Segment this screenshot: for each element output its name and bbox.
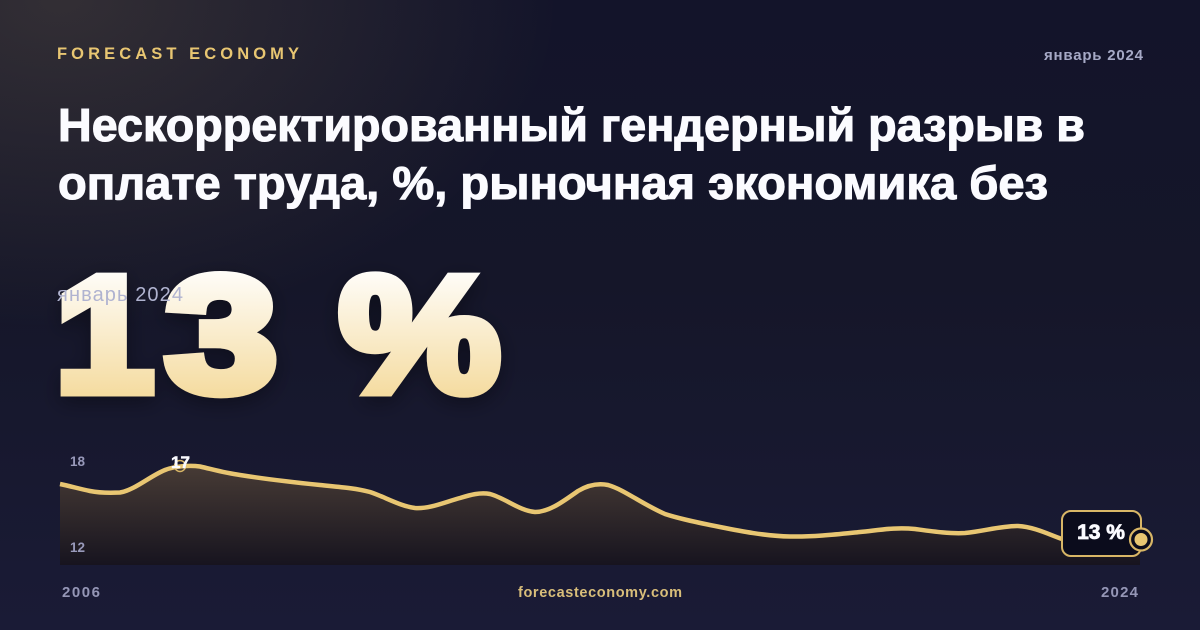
title: оплате труда, %, рыночная экономика без [58, 157, 1048, 209]
big number [55, 242, 500, 427]
axis label 18: 18 [70, 454, 86, 469]
big number: 1 [55, 244, 154, 427]
brand label: FORECAST ECONOMY [57, 45, 299, 63]
callout: last value [1062, 511, 1141, 556]
chart line [60, 466, 1062, 539]
title [58, 99, 1085, 209]
big number: 3 [166, 242, 277, 426]
axis label 12: 12 [70, 540, 85, 555]
end year: 2024 [1101, 584, 1139, 601]
big number: % [340, 243, 500, 426]
end marker [1130, 528, 1152, 550]
start year: 2006 [62, 584, 100, 601]
callout: last value: 13 % [1077, 521, 1125, 544]
source site: forecasteconomy.com [518, 585, 682, 601]
overlapping date label: январь 2024 [57, 284, 183, 306]
title: Нескорректированный гендерный разрыв в [58, 99, 1085, 151]
date top right: январь 2024 [1044, 47, 1144, 64]
chart area [60, 466, 1140, 565]
chart [60, 453, 1152, 565]
peak marker: 17 [171, 453, 190, 472]
